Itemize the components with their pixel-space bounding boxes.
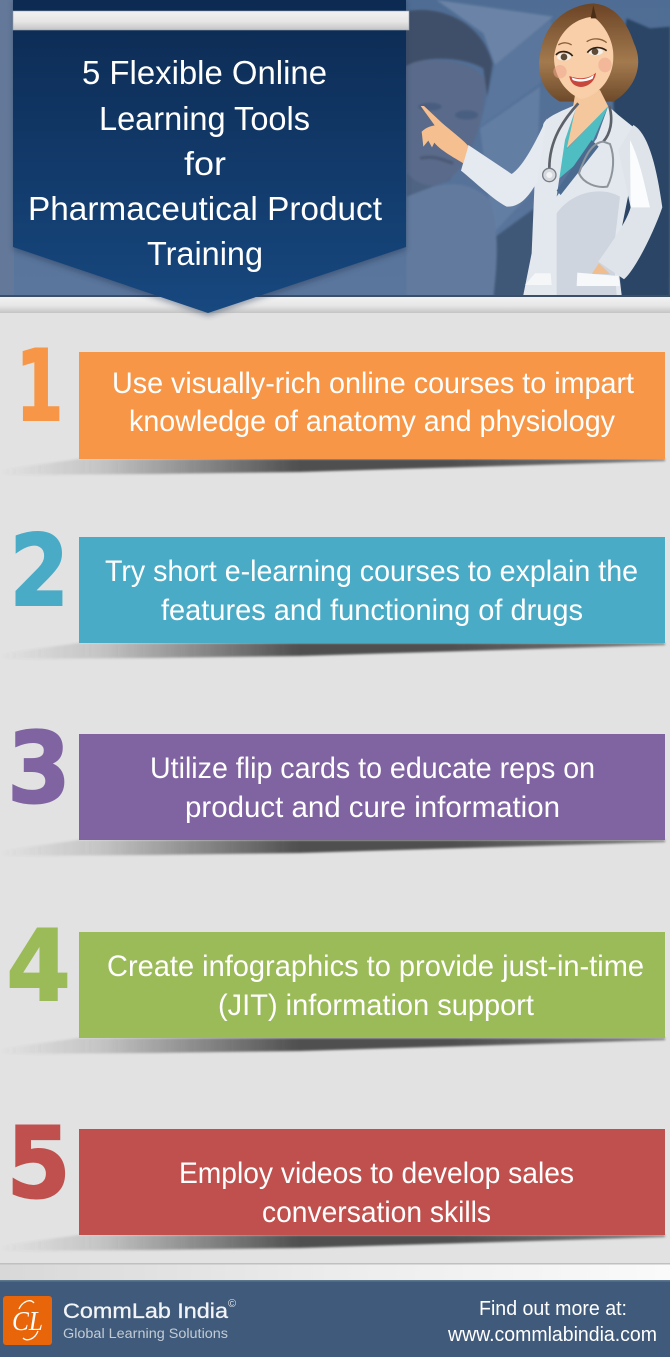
card text 1: knowledge of anatomy and physiology [129, 405, 615, 438]
card text 3: Utilize flip cards to educate reps on [150, 752, 595, 785]
doctor stethoscope [549, 103, 613, 187]
card 3 [79, 734, 665, 840]
item 5 [0, 1107, 665, 1251]
shadow 1 [0, 459, 665, 475]
card text 5: Employ videos to develop sales [179, 1157, 574, 1190]
doctor hand in pocket [592, 263, 610, 274]
number 3: 3 [7, 712, 71, 826]
title: 5 Flexible Online [82, 54, 327, 91]
card text 5: conversation skills [262, 1196, 491, 1229]
title: Training [147, 235, 263, 272]
card text 1 [112, 367, 634, 438]
card text 4 [107, 950, 644, 1022]
card text 5 [179, 1157, 574, 1229]
number 2: 2 [10, 514, 69, 628]
footer [0, 1280, 670, 1357]
number 5: 5 [6, 1107, 71, 1221]
bottom header bar [0, 295, 670, 313]
card text 1: Use visually-rich online courses to impart [112, 367, 634, 400]
title: Learning Tools [99, 100, 310, 137]
item 4 [0, 910, 665, 1054]
number 1: 1 [16, 328, 63, 443]
copyright mark: © [228, 1298, 236, 1310]
doctor hair [539, 3, 638, 102]
shadow 2 [0, 643, 665, 659]
doctor pointing hand [421, 106, 468, 163]
doctor neck [567, 90, 608, 148]
card text 2 [105, 555, 638, 627]
dim woman in photo [405, 10, 497, 297]
number 4: 4 [6, 910, 71, 1024]
card text 4: Create infographics to provide just-in-time [107, 950, 644, 983]
doctor scrub top [553, 106, 608, 183]
doctor right arm on hip [598, 125, 662, 279]
card 2 [79, 537, 665, 643]
card text 3: product and cure information [185, 791, 560, 824]
title: for [184, 145, 226, 182]
title banner [13, 0, 409, 316]
logo icon: CL [12, 1306, 43, 1336]
header photo background [0, 0, 670, 297]
shadow 5 [0, 1235, 665, 1251]
doctor coat torso [523, 104, 635, 295]
card text 2: Try short e-learning courses to explain the [105, 555, 638, 588]
item 3 [0, 712, 665, 856]
shadow 3 [0, 840, 665, 856]
doctor lapel strip [557, 140, 599, 195]
footer bar [0, 1263, 670, 1280]
card 1 [79, 352, 665, 459]
doctor eyes [557, 53, 571, 61]
card text 3 [150, 752, 595, 824]
card 5 [79, 1129, 665, 1235]
card text 2: features and functioning of drugs [161, 594, 583, 627]
doctor mouth [569, 73, 596, 87]
find out more: Find out more at: [479, 1298, 627, 1320]
doctor pointing arm [461, 118, 547, 207]
card 4 [79, 932, 665, 1038]
website: www.commlabindia.com [447, 1324, 657, 1346]
card text 4: (JIT) information support [218, 989, 534, 1022]
illustrated doctor [421, 3, 662, 295]
item 1 [0, 328, 665, 475]
logo icon [3, 1296, 52, 1345]
title: Pharmaceutical Product [28, 190, 382, 227]
brand name: CommLab India [63, 1299, 228, 1323]
shadow 4 [0, 1038, 665, 1054]
doctor face [554, 17, 613, 99]
banner top bar [13, 11, 409, 30]
tagline: Global Learning Solutions [63, 1326, 228, 1341]
title [28, 54, 382, 272]
item 2 [0, 514, 665, 659]
